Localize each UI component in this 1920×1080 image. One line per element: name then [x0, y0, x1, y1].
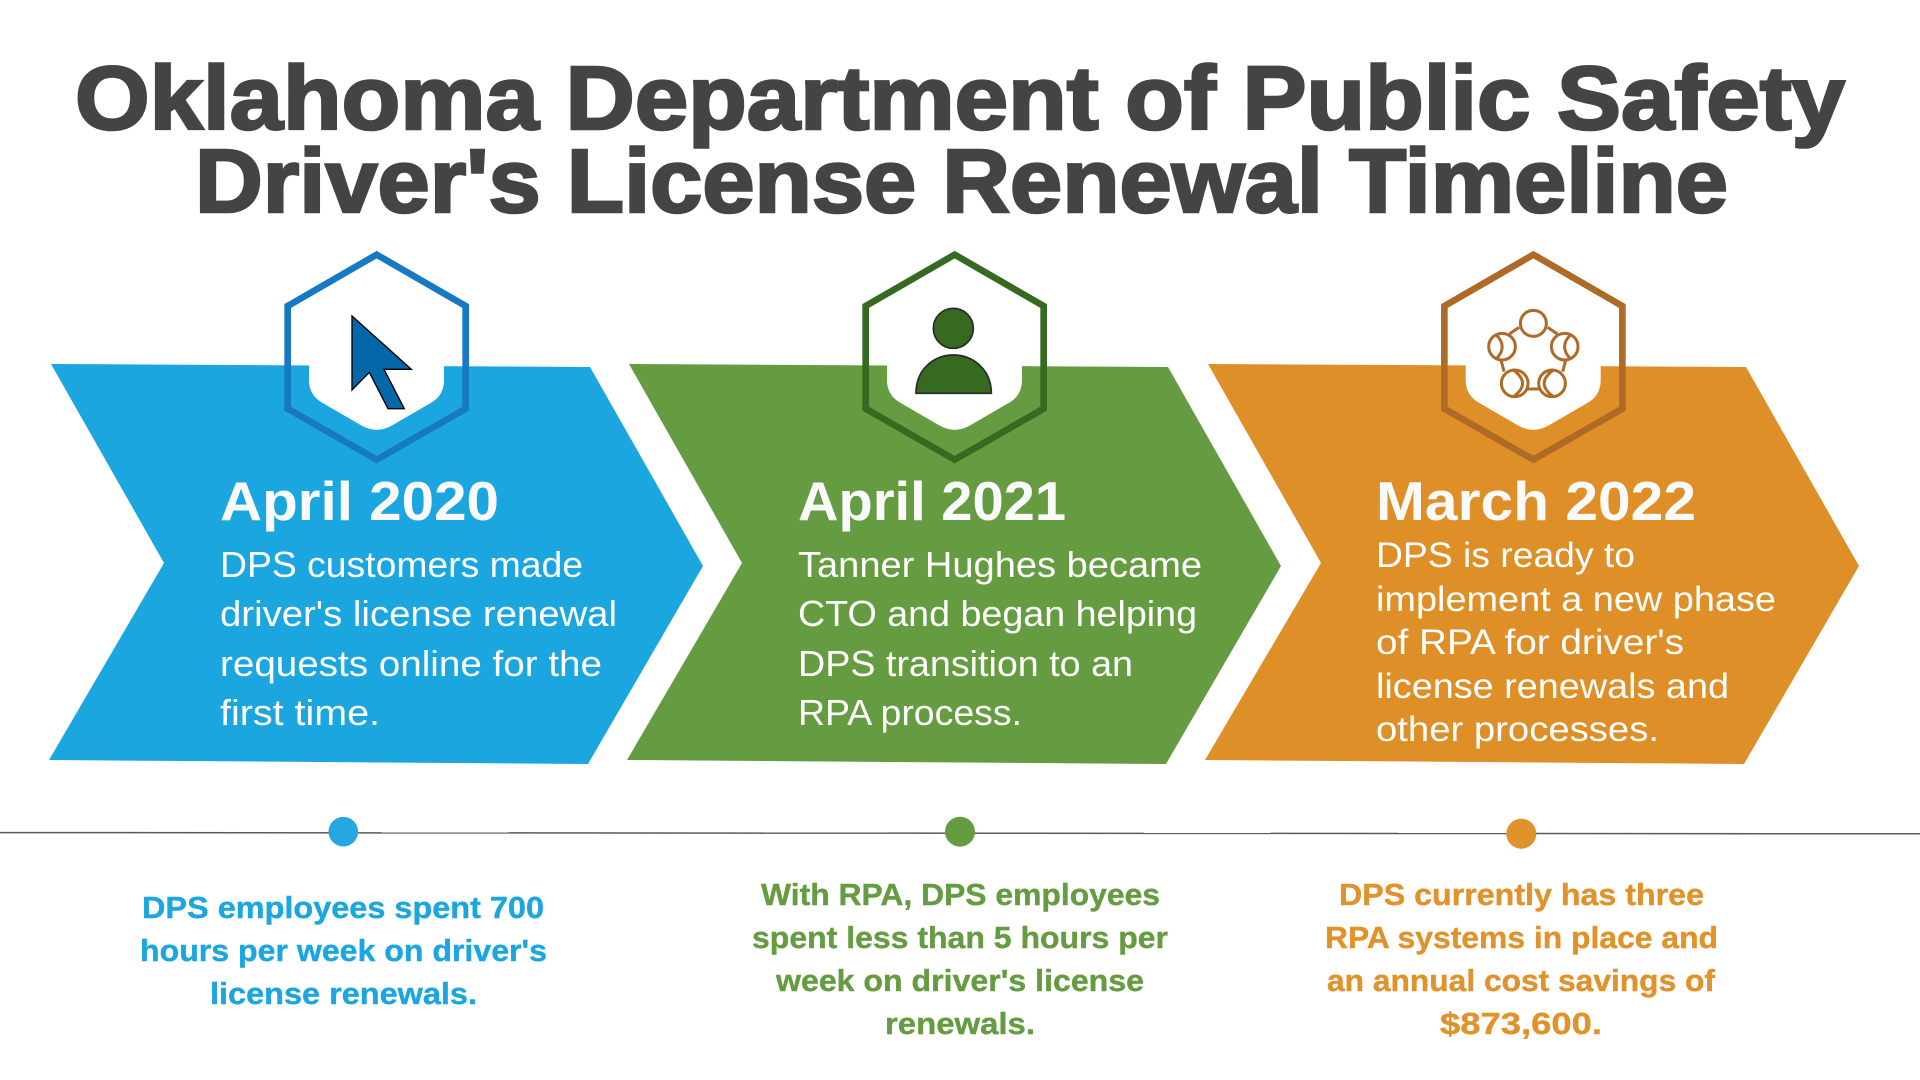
date: April 2020: [220, 470, 499, 532]
note: 700 hours: [140, 890, 547, 1011]
timeline dot: March 2022: [1506, 819, 1536, 849]
description: DPS is ready to: [1376, 536, 1635, 575]
note: under 5 hours: renewals.: [885, 1006, 1035, 1041]
title: Oklahoma Department of Public Safety: [75, 49, 1845, 149]
note: cost savings: RPA systems in place and: [1325, 920, 1718, 955]
note: cost savings: $873,600.: [1440, 1006, 1602, 1041]
note: cost savings: an annual cost savings of: [1327, 963, 1716, 998]
timeline line: [0, 833, 1920, 834]
panel: April 2021: [627, 255, 1281, 764]
note: under 5 hours: week on driver's license: [775, 963, 1144, 998]
note: 700 hours: license renewals.: [210, 976, 477, 1011]
description: Tanner Hughes became: [798, 544, 1202, 585]
icon: orbit cycle in hexagon: [1444, 255, 1622, 460]
description: DPS transition to an: [798, 643, 1133, 684]
description: [1376, 536, 1776, 749]
description: implement a new phase: [1376, 580, 1776, 619]
description: license renewals and: [1376, 667, 1729, 706]
note: cost savings: [1325, 877, 1718, 1041]
note: under 5 hours: spent less than 5 hours per: [752, 920, 1168, 955]
note: under 5 hours: With RPA, DPS employees: [761, 877, 1160, 912]
timeline dot: April 2021: [945, 817, 975, 847]
description: [798, 544, 1202, 733]
icon: person in hexagon: [866, 255, 1044, 460]
icon: cursor in hexagon: [288, 255, 466, 460]
panel: March 2022: [1205, 255, 1859, 764]
description: DPS customers made: [220, 544, 583, 585]
description: [220, 544, 617, 733]
title: Driver's License Renewal Timeline: [195, 132, 1728, 232]
description: RPA process.: [798, 692, 1022, 733]
date: March 2022: [1376, 470, 1696, 532]
description: of RPA for driver's: [1376, 623, 1684, 662]
chevron: green: [627, 364, 1281, 764]
description: requests online for the: [220, 643, 602, 684]
description: first time.: [220, 692, 380, 733]
date: April 2021: [798, 470, 1066, 532]
title: [75, 49, 1845, 232]
description: other processes.: [1376, 710, 1659, 749]
note: 700 hours: DPS employees spent 700: [142, 890, 544, 925]
note: cost savings: DPS currently has three: [1339, 877, 1704, 912]
note: under 5 hours: [752, 877, 1168, 1041]
description: driver's license renewal: [220, 593, 617, 634]
note: 700 hours: hours per week on driver's: [140, 933, 547, 968]
chevron: orange: [1205, 364, 1859, 764]
timeline dot: April 2020: [328, 817, 358, 846]
chevron: blue: [49, 364, 703, 764]
description: CTO and began helping: [798, 593, 1197, 634]
panel: April 2020: [49, 255, 703, 764]
